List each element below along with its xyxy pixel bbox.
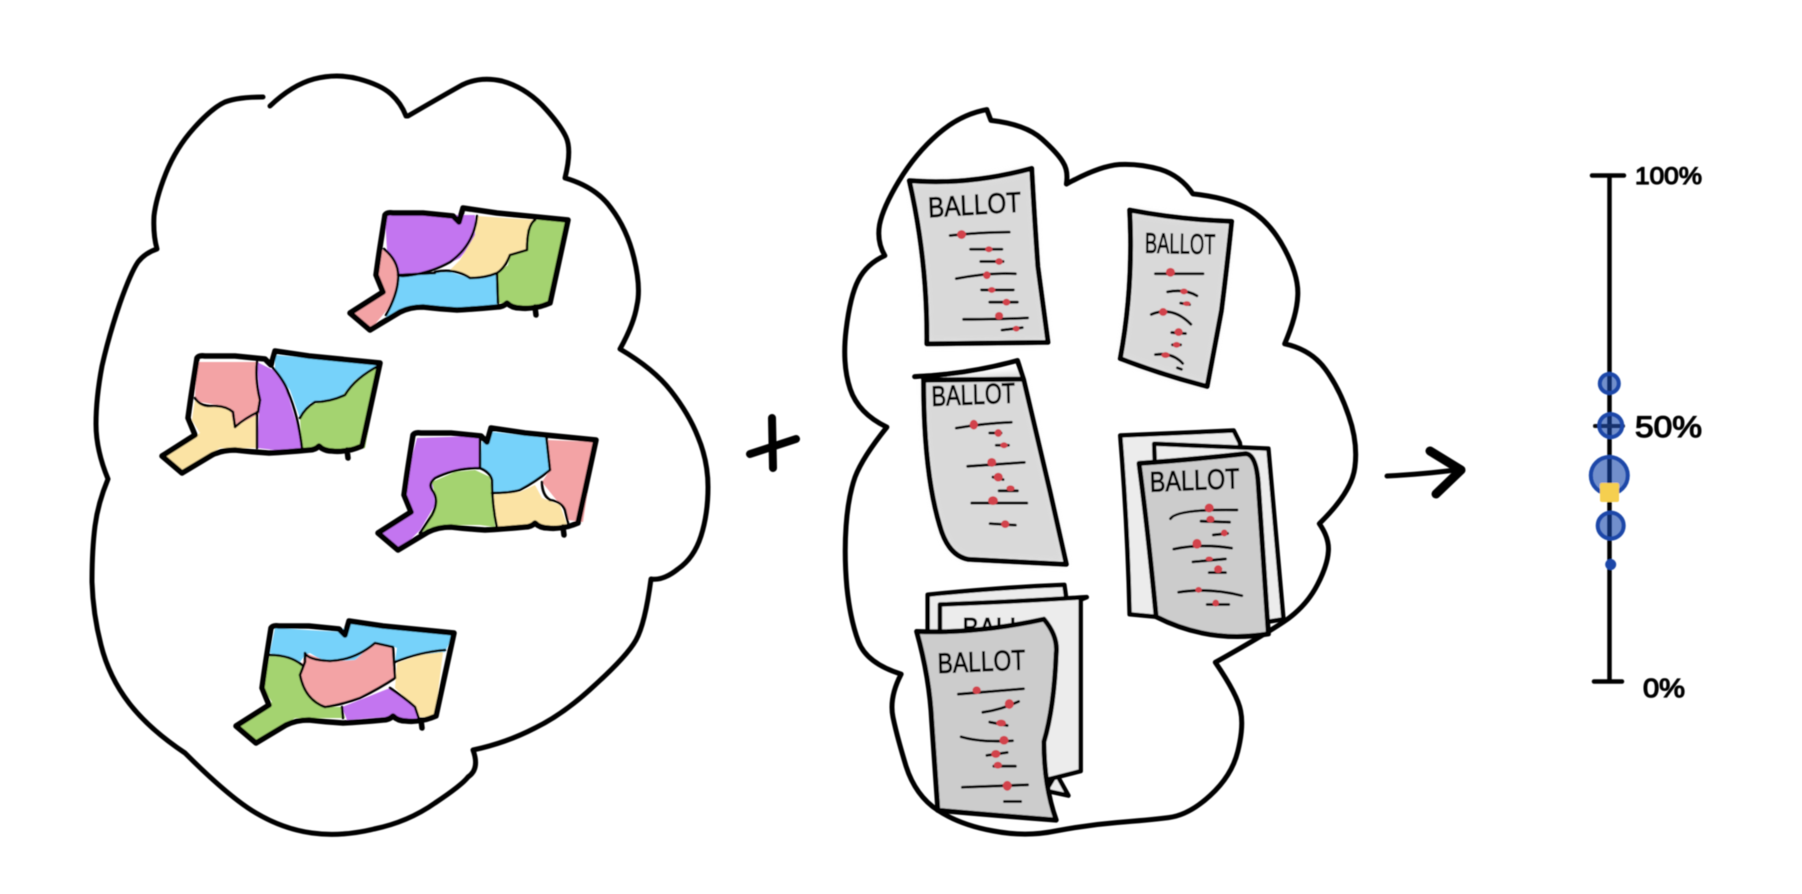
ballot 1 bbox=[909, 168, 1048, 344]
ballot 3 bbox=[915, 360, 1066, 564]
ballot stack 4 bbox=[1120, 431, 1283, 637]
data point 1 bbox=[1600, 374, 1619, 393]
ballot stack 5: BALL bbox=[962, 612, 1024, 644]
ballot stack 5: BALLOT bbox=[937, 643, 1026, 680]
data point 5 bbox=[1605, 559, 1616, 570]
panel: maps cloud bbox=[92, 76, 708, 834]
map 4 bbox=[235, 621, 454, 743]
label: 100%: 100% bbox=[1635, 163, 1702, 190]
label: 0%: 0% bbox=[1643, 673, 1685, 703]
yellow marker bbox=[1600, 483, 1619, 502]
ballot 1: BALLOT bbox=[927, 186, 1022, 224]
ballot 2: BALLOT bbox=[1145, 227, 1216, 261]
data point 3 bbox=[1591, 457, 1628, 494]
label: 50%: 50% bbox=[1635, 411, 1702, 444]
map 3 bbox=[378, 428, 596, 550]
ballot stack 5 bbox=[917, 585, 1087, 820]
ballot stack 4: BALLOT bbox=[1149, 462, 1240, 498]
50% tick bbox=[1595, 424, 1623, 428]
arrow bbox=[1387, 451, 1461, 494]
map 2 bbox=[162, 351, 380, 473]
ballot 3: BALLOT bbox=[931, 376, 1016, 413]
plus sign bbox=[750, 418, 796, 468]
ballot 2 bbox=[1120, 210, 1232, 386]
data point 2 bbox=[1599, 414, 1622, 437]
cloud outline: ballots bbox=[845, 110, 1356, 834]
data point 4 bbox=[1598, 513, 1624, 539]
cloud outline: maps bbox=[92, 76, 708, 834]
axis line bbox=[1592, 176, 1624, 682]
drawing bbox=[92, 76, 1702, 834]
chart: percentage scale bbox=[1591, 163, 1702, 703]
panel: ballots cloud bbox=[845, 110, 1356, 834]
map 1 bbox=[350, 208, 568, 330]
